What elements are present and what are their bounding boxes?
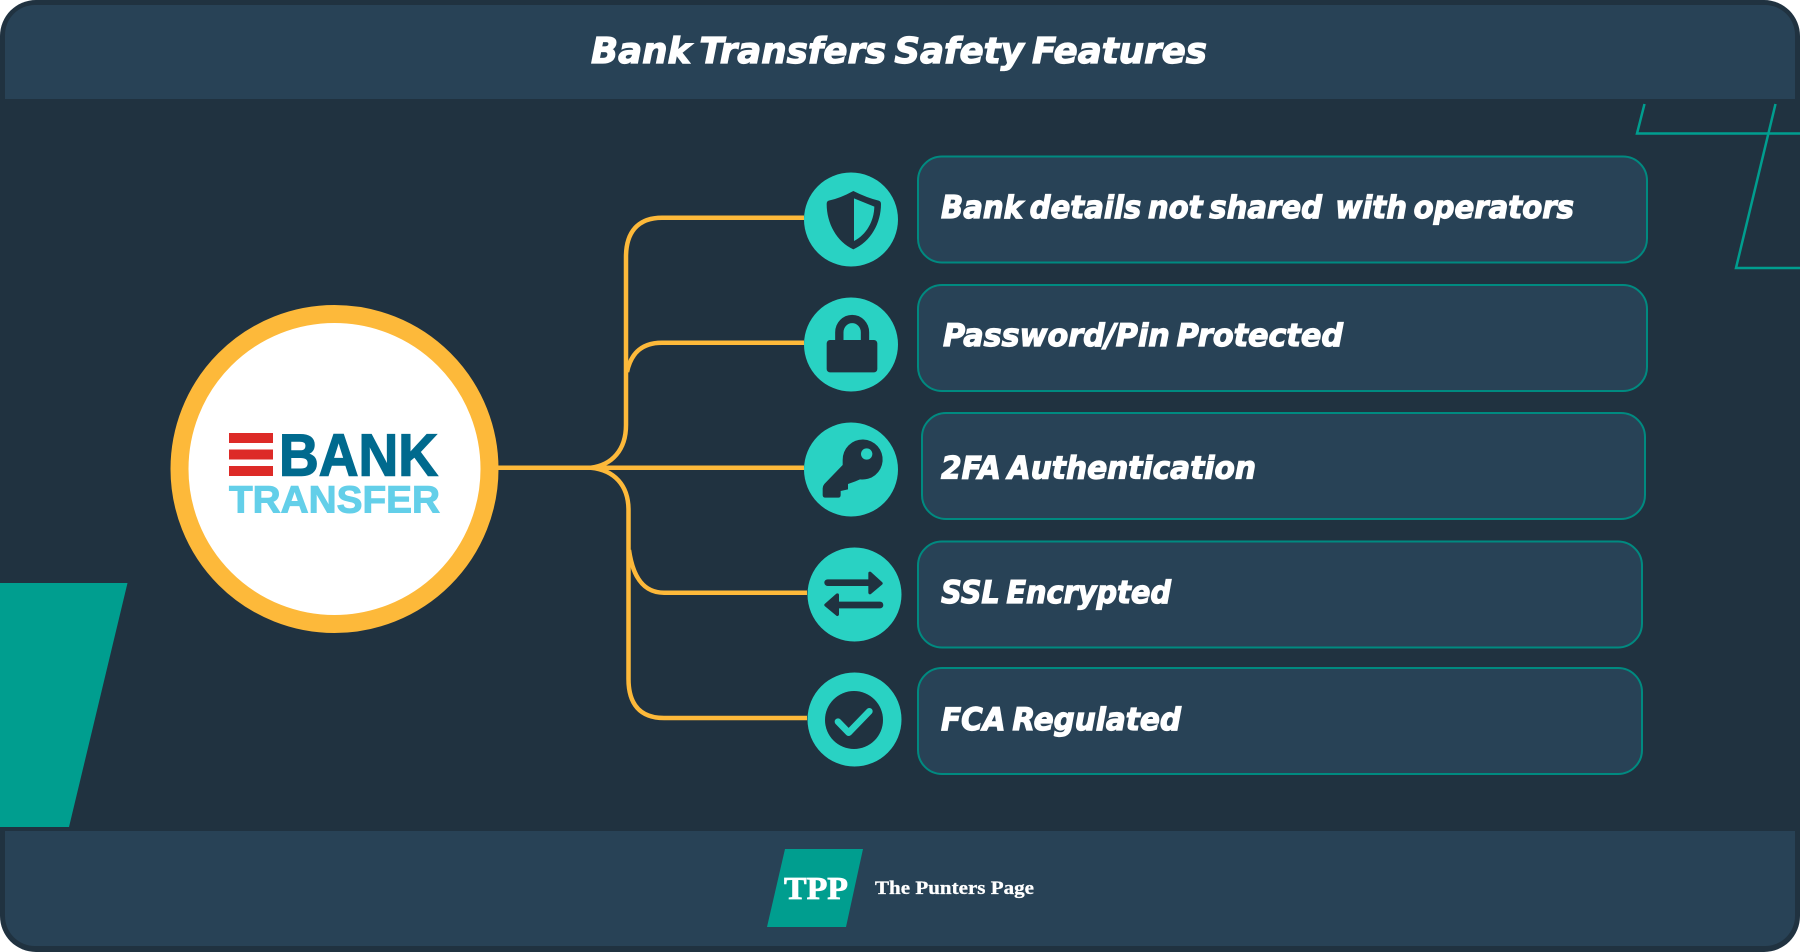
footer brand logo: TPP [784,870,848,906]
footer band [5,831,1795,946]
feature row 1: Bank details not shared with operators [941,190,1574,226]
icon: shield [804,172,898,266]
feature row 2: Password/Pin Protected [943,318,1344,354]
feature row 5: FCA Regulated [941,702,1182,738]
feature row 4: SSL Encrypted [941,575,1172,611]
footer brand logo [767,849,863,927]
feature row 3 [922,413,1645,519]
logo word: TRANSFER: TRANSFER [229,480,440,522]
bank transfer logo circle [180,314,490,624]
feature row 1 [918,156,1647,262]
header band [5,5,1795,99]
feature row 4 [918,542,1642,648]
feature row 5 [918,668,1642,774]
logo word: BANK: BANK [279,422,438,488]
feature row 2 [918,285,1647,391]
feature row 3: 2FA Authentication [941,450,1256,486]
decoration: teal trapezoid [0,583,128,827]
footer brand name: The Punters Page [875,878,1034,899]
icon: check mark [808,672,902,766]
decoration: teal outline lines [1637,104,1800,268]
logo red bars [229,433,273,476]
icon: transfer arrows [808,548,902,642]
icon: key [804,422,898,516]
connector lines [498,218,807,718]
icon: padlock [804,298,898,392]
title: Bank Transfers Safety Features [591,31,1207,72]
